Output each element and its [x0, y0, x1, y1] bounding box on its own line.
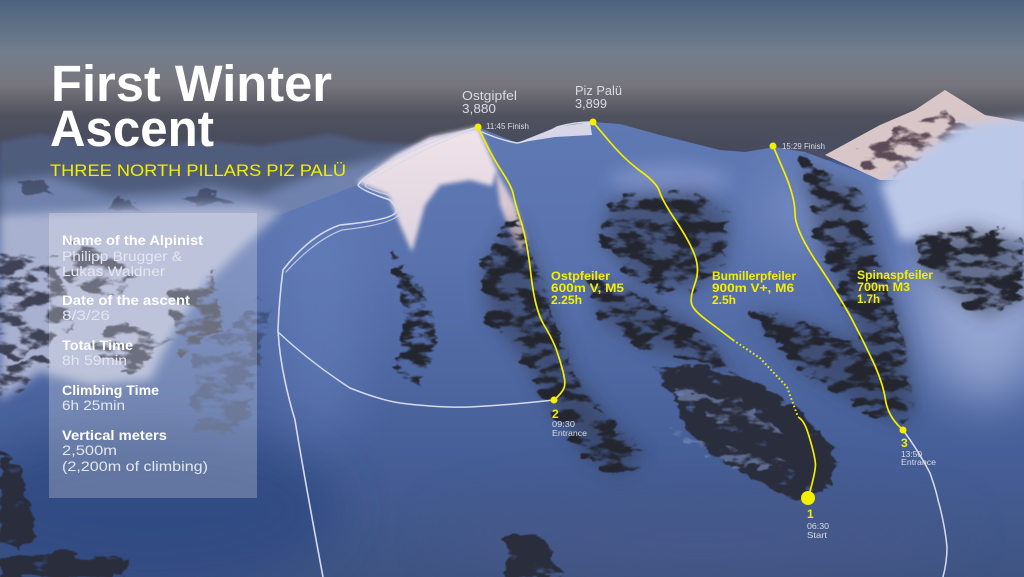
background: main snow massif — [0, 122, 1024, 577]
panel text: total time: 8h 59min — [62, 352, 127, 368]
route label: Ostpfeiler: 2.25h — [551, 293, 582, 307]
summit label: Piz Palü: 3,899 — [575, 96, 607, 111]
route label: Spinaspfeiler — [857, 268, 933, 306]
waypoint 2 label: 2 — [552, 407, 559, 421]
background: rock faces, soft underlay — [482, 165, 1024, 475]
route label: Ostpfeiler: Ostpfeiler — [551, 269, 610, 283]
panel text: total time — [62, 337, 133, 368]
route label: Bumillerpfeiler: 2.5h — [712, 293, 736, 307]
waypoint 1 label: Start — [807, 530, 828, 540]
summit label: Ostgipfel — [462, 88, 517, 116]
background: rock faces, mottled — [392, 155, 1024, 478]
finish time labels: 15:29 Finish — [782, 141, 825, 151]
subtitle: THREE NORTH PILLARS PIZ PALÜ — [50, 161, 346, 180]
background: Ostgipfel pink snow — [357, 122, 592, 255]
waypoint 3 label — [901, 436, 936, 467]
panel text: vertical meters: 2,500m — [62, 442, 117, 458]
finish time labels — [486, 121, 825, 151]
panel text: alpinists: Philipp Brugger & — [62, 248, 183, 264]
summit label: Piz Palü: Piz Palü — [575, 83, 622, 98]
panel text: vertical meters: (2,200m of climbing) — [62, 458, 208, 474]
approach trail: white double line and branch — [278, 122, 947, 577]
panel text: date: Date of the ascent — [62, 292, 190, 308]
route 1: Bumillerpfeiler — [593, 122, 816, 498]
background: snow light and shadow — [0, 164, 1024, 577]
panel text: total time: Total Time — [62, 337, 133, 353]
route label: Bumillerpfeiler: Bumillerpfeiler — [712, 269, 796, 283]
route markers — [474, 118, 906, 505]
route label: Bumillerpfeiler: 900m V+, M6 — [712, 281, 794, 295]
waypoint 3 label: 13:50 — [901, 449, 922, 459]
background: right peak — [825, 90, 1024, 240]
background: snow streaks on buttress — [665, 388, 790, 465]
panel text: vertical meters: Vertical meters — [62, 427, 167, 443]
waypoint 3 label: Entrance — [901, 457, 936, 467]
route 3: Spinaspfeiler — [773, 146, 903, 430]
info panel — [49, 213, 257, 498]
route label: Spinaspfeiler: Spinaspfeiler — [857, 268, 933, 282]
panel text: climbing time — [62, 382, 159, 413]
panel text: climbing time: Climbing Time — [62, 382, 159, 398]
panel text: alpinists: Lukas Waldner — [62, 263, 165, 279]
background: distant mountains — [0, 134, 470, 330]
panel text: alpinists — [62, 232, 203, 279]
route 2: Ostpfeiler — [478, 127, 565, 400]
finish time labels: 11:45 Finish — [486, 121, 529, 131]
background: lit left slope — [0, 205, 282, 440]
background: sky — [0, 0, 1024, 160]
waypoint 2 label — [552, 407, 587, 438]
panel text: date: 8/3/26 — [62, 307, 110, 323]
waypoint 2 label: 09:30 — [552, 419, 575, 429]
panel text: alpinists: Name of the Alpinist — [62, 232, 203, 248]
route label: Spinaspfeiler: 1.7h — [857, 292, 880, 306]
route label: Bumillerpfeiler — [712, 269, 796, 307]
panel text: climbing time: 6h 25min — [62, 397, 125, 413]
panel text: date — [62, 292, 190, 323]
summit label: Ostgipfel: 3,880 — [462, 101, 496, 116]
title: Ascent — [50, 100, 214, 157]
title — [50, 55, 332, 157]
waypoint 3 label: 3 — [901, 436, 908, 450]
route label: Ostpfeiler: 600m V, M5 — [551, 281, 624, 295]
waypoint 1 label: 06:30 — [807, 521, 829, 531]
waypoint 1 label: 1 — [807, 507, 814, 521]
summit label: Ostgipfel: Ostgipfel — [462, 88, 517, 103]
route label: Ostpfeiler — [551, 269, 624, 307]
background: dark lower buttress and bottom rocks — [0, 365, 835, 577]
route label: Spinaspfeiler: 700m M3 — [857, 280, 910, 294]
panel text: vertical meters — [62, 427, 208, 474]
summit label: Piz Palü — [575, 83, 622, 111]
waypoint 1 label — [807, 507, 829, 540]
title: First Winter — [51, 55, 332, 112]
waypoint 2 label: Entrance — [552, 428, 587, 438]
